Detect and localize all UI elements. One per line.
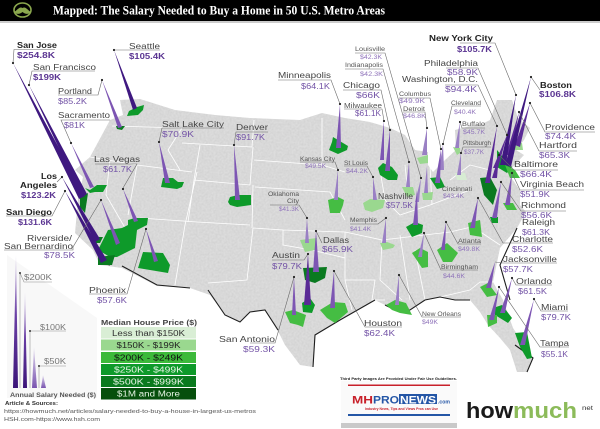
label: Louisville <box>355 46 386 61</box>
label: Sacramento <box>58 110 110 130</box>
MHProNews logo: PRO <box>373 394 399 406</box>
label: New York City: $105.7K <box>457 44 493 54</box>
legend: annual salary needed spikes: $200K <box>24 273 53 282</box>
legend: median house price: $1M and More <box>117 390 181 398</box>
label: Baltimore: Baltimore <box>514 159 558 169</box>
howmuch.net logo: net <box>582 406 593 412</box>
article and sources: https://howmuch.net/articles/salary-needed-to-buy-a-house-in-largest-us-metros <box>4 409 256 415</box>
legend: annual salary needed spikes <box>7 255 97 399</box>
label: Philadelphia <box>424 58 478 77</box>
label: Sacramento: Sacramento <box>58 110 110 120</box>
label: Phoenix: Phoenix <box>89 285 127 295</box>
MHProNews logo: MH <box>352 394 373 406</box>
label: Salt Lake City <box>162 119 225 139</box>
label: Chicago <box>343 80 380 100</box>
label: Oklahoma City <box>268 191 300 213</box>
label: Chicago: $66K <box>356 90 380 100</box>
label: Houston <box>364 318 402 338</box>
metro areas shaded by median house price <box>80 105 532 359</box>
label: Seattle: $105.4K <box>129 51 166 61</box>
label: Buffalo: Buffalo <box>462 121 486 128</box>
label: Portland: Portland <box>58 86 92 96</box>
label: Miami: $79.7K <box>541 312 571 322</box>
label: Minneapolis: $64.1K <box>301 81 330 91</box>
label: Oklahoma City: $41.3K <box>279 206 300 213</box>
label: Pittsburgh: $37.7K <box>464 149 485 156</box>
article and sources: Article & Sources: <box>5 401 58 407</box>
label: Charlotte <box>512 234 553 254</box>
label: Buffalo: $45.7K <box>463 129 486 136</box>
label: Richmond: Richmond <box>521 200 566 210</box>
label: New Orleans <box>422 311 461 326</box>
label: Raleigh: Raleigh <box>522 217 555 227</box>
label: Richmond: $56.6K <box>521 210 552 220</box>
label: Columbus: Columbus <box>399 91 431 98</box>
label: Denver <box>236 122 268 142</box>
label: Pittsburgh <box>463 140 492 156</box>
label: San Francisco: San Francisco <box>33 62 96 72</box>
label: San Jose <box>17 40 57 60</box>
icon: logo badge <box>14 3 31 17</box>
label: Cleveland: $40.4K <box>454 109 477 116</box>
label: Portland <box>58 86 92 106</box>
label: Indianapolis: $42.3K <box>360 71 384 78</box>
label: Riverside / San Bernardino <box>4 233 75 260</box>
label: Sacramento: $81K <box>64 120 85 130</box>
label: Minneapolis <box>278 70 331 91</box>
legend: median house price: $150K - $199K <box>116 341 181 350</box>
label: Birmingham <box>441 264 478 280</box>
label: Orlando: Orlando <box>516 276 552 286</box>
label: Las Vegas <box>94 154 140 174</box>
label: Chicago: Chicago <box>343 80 380 90</box>
label: Milwaukee <box>344 103 382 118</box>
label: Providence: Providence <box>545 122 595 132</box>
label: Hartford: Hartford <box>539 140 577 150</box>
label: Phoenix: $57.6K <box>97 295 127 305</box>
label: Atlanta: $49.8K <box>458 246 481 253</box>
label: Virginia Beach <box>520 179 584 199</box>
label: Providence: $74.4K <box>545 131 576 141</box>
label: Oklahoma City: City <box>287 198 300 205</box>
label: Columbus <box>399 91 431 105</box>
howmuch.net logo <box>466 398 593 423</box>
label: Minneapolis: Minneapolis <box>278 70 331 80</box>
label: Columbus: $49.9K <box>399 98 426 105</box>
MHProNews logo: .com <box>438 400 451 406</box>
label: Miami <box>541 302 571 322</box>
label: Pittsburgh: Pittsburgh <box>463 140 492 147</box>
label: New Orleans: $49K <box>422 319 439 326</box>
label: Boston: Boston <box>540 80 572 90</box>
label: San Diego: $131.6K <box>18 217 53 227</box>
label: Hartford <box>539 140 577 160</box>
title bar <box>0 0 600 23</box>
title bar: Mapped: The Salary Needed to Buy a Home in 50 U.S. Metro Areas <box>53 2 385 18</box>
label: Los Angeles <box>20 171 57 200</box>
label: Atlanta: Atlanta <box>458 238 482 245</box>
label: Hartford: $65.3K <box>539 150 570 160</box>
label: San Antonio: San Antonio <box>219 334 275 344</box>
label: Portland: $85.2K <box>58 96 87 106</box>
label: Riverside / San Bernardino: Riverside/ <box>27 233 73 243</box>
label: San Francisco <box>33 62 96 82</box>
label: Louisville: $42.3K <box>360 54 383 61</box>
label: Birmingham: $44.6K <box>443 273 466 280</box>
label: Austin <box>272 250 302 271</box>
legend: median house price: Less than $150K <box>112 329 186 338</box>
legend: median house price <box>101 318 198 400</box>
article and sources: HSH.com-https://www.hsh.com <box>4 417 101 423</box>
label: Detroit: $46.8K <box>403 113 427 120</box>
label: Houston: Houston <box>364 318 402 328</box>
label: Miami: Miami <box>541 302 568 312</box>
label: Las Vegas: Las Vegas <box>94 154 140 164</box>
legend: annual salary needed spikes: Annual Salary Needed ($) <box>10 392 96 399</box>
legend: annual salary needed spikes: $50K <box>44 357 67 366</box>
label: Kansas City: Kansas City <box>300 156 336 163</box>
label: Kansas City: $49.5K <box>305 163 327 170</box>
label: Baltimore <box>514 159 558 179</box>
label: Orlando: $61.5K <box>518 286 547 296</box>
label: Tampa <box>540 338 569 359</box>
map: United States base <box>75 99 533 372</box>
label: Jacksonville: Jacksonville <box>503 254 557 264</box>
label: Milwaukee: $61.1K <box>355 108 381 118</box>
label: Philadelphia: Philadelphia <box>424 58 478 68</box>
label: San Francisco: $199K <box>33 72 62 82</box>
howmuch.net logo: much <box>513 398 577 423</box>
legend: median house price: $200K - $249K <box>114 354 184 362</box>
MHProNews logo: Third Party Images Are Provided Under Fair Use Guidelines. <box>340 377 457 381</box>
label: Washington, D.C. <box>402 74 478 94</box>
label: Detroit <box>403 106 427 120</box>
label: Tampa: Tampa <box>540 338 569 348</box>
article and sources <box>4 401 256 423</box>
label: Virginia Beach: Virginia Beach <box>520 179 584 189</box>
label: San Antonio <box>219 334 275 354</box>
MHProNews logo: NEWS <box>400 394 436 406</box>
label: Louisville: Louisville <box>355 46 386 53</box>
label: Raleigh: $61.3K <box>522 227 550 237</box>
label: Cincinnati <box>442 186 472 200</box>
label: Tampa: $55.1K <box>541 349 568 359</box>
label: Phoenix <box>89 285 127 305</box>
label: Dallas: Dallas <box>323 235 349 245</box>
label: Seattle <box>129 41 166 61</box>
label: Indianapolis <box>345 62 384 78</box>
label: St Louis <box>344 160 369 175</box>
label: Memphis: $41.4K <box>350 226 372 233</box>
label: Detroit: Detroit <box>403 106 425 113</box>
label: Milwaukee: Milwaukee <box>344 103 382 110</box>
label: Baltimore: $66.4K <box>520 169 552 179</box>
MHProNews logo <box>340 377 457 428</box>
label: Los Angeles: Los <box>41 171 57 181</box>
legend: median house price: $500K - $999K <box>113 378 185 386</box>
label: Charlotte: $52.6K <box>512 244 543 254</box>
label: Dallas <box>322 235 353 254</box>
label: New York City: New York City <box>429 33 493 43</box>
label: Dallas: $65.9K <box>322 244 353 254</box>
salary spikes <box>13 50 534 345</box>
label: Kansas City <box>300 156 336 170</box>
label: Austin: $79.7K <box>272 261 302 271</box>
legend: annual salary needed spikes: $100K <box>40 323 67 332</box>
label: Nashville: $57.5K <box>386 200 413 210</box>
label: San Antonio: $59.3K <box>243 344 275 354</box>
label: New Orleans: New Orleans <box>422 311 461 318</box>
label: Washington, D.C.: Washington, D.C. <box>402 74 478 84</box>
label: Salt Lake City: Salt Lake City <box>162 119 225 129</box>
label: San Diego: San Diego <box>6 207 52 217</box>
legend: median house price: Median House Price ($) <box>101 318 198 327</box>
label: Richmond <box>521 200 566 220</box>
leader lines and dots <box>4 43 595 347</box>
label: Los Angeles: $123.2K <box>21 190 57 200</box>
label: Indianapolis: Indianapolis <box>345 62 383 69</box>
label: Denver: Denver <box>236 122 268 132</box>
label: Austin: Austin <box>272 250 300 260</box>
label: Riverside / San Bernardino: $78.5K <box>44 250 75 260</box>
label: Charlotte: Charlotte <box>512 234 553 244</box>
legend: median house price: $250K - $499K <box>114 366 184 374</box>
label: St Louis: St Louis <box>344 160 368 167</box>
label: Las Vegas: $61.7K <box>103 164 132 174</box>
label: Atlanta <box>458 238 482 253</box>
label: Cleveland: Cleveland <box>451 100 482 107</box>
label: Virginia Beach: $51.9K <box>520 189 550 199</box>
label: Memphis <box>350 217 377 233</box>
label: Los Angeles: Angeles <box>20 180 57 190</box>
label: Nashville: Nashville <box>378 191 413 201</box>
label: Jacksonville <box>503 254 557 274</box>
label: St Louis: $44.2K <box>346 168 369 175</box>
label: Birmingham: Birmingham <box>441 264 478 271</box>
label: Cincinnati: Cincinnati <box>442 186 472 193</box>
label: New York City <box>429 33 493 54</box>
label: Seattle: Seattle <box>129 41 160 51</box>
label: Jacksonville: $57.7K <box>503 264 533 274</box>
label: San Jose: $254.8K <box>17 50 56 60</box>
label: Boston <box>539 80 577 99</box>
label: Houston: $62.4K <box>364 328 395 338</box>
label: Orlando <box>516 276 552 296</box>
label: San Jose: San Jose <box>17 40 57 50</box>
label: Raleigh <box>522 217 555 237</box>
label: Philadelphia: $58.9K <box>447 67 478 77</box>
label: Oklahoma City: Oklahoma <box>268 191 300 198</box>
label: Buffalo <box>462 121 486 136</box>
label: Cleveland <box>451 100 482 116</box>
howmuch.net logo: how <box>466 398 514 423</box>
label: Denver: $91.7K <box>236 132 265 142</box>
MHProNews logo: Industry News, Tips and Views Pros can Use <box>365 407 438 411</box>
label: Providence <box>545 122 595 141</box>
label: San Diego <box>6 207 53 227</box>
label: Nashville <box>378 191 413 210</box>
label: Memphis: Memphis <box>350 217 377 224</box>
label: Salt Lake City: $70.9K <box>162 129 194 139</box>
label: Riverside / San Bernardino: San Bernardino <box>4 241 73 251</box>
label: Boston: $106.8K <box>539 89 577 99</box>
label: Washington, D.C.: $94.4K <box>445 84 477 94</box>
label: Cincinnati: $43.4K <box>443 193 465 200</box>
